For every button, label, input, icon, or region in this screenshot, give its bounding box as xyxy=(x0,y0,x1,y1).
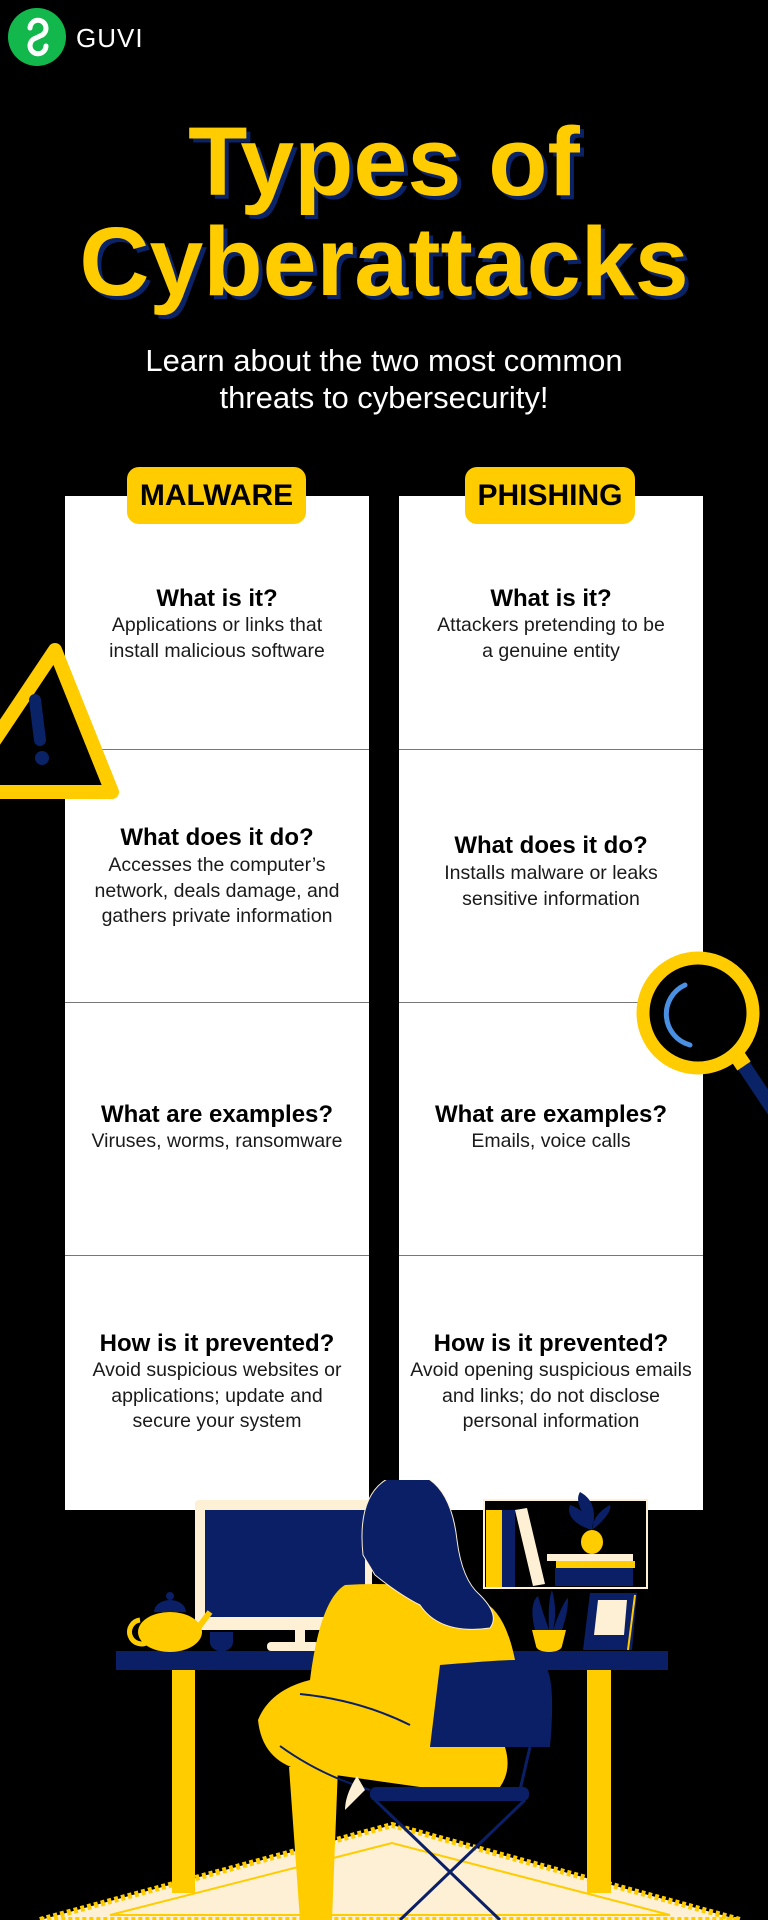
title xyxy=(79,107,689,319)
panel: phishing: personal information xyxy=(463,1410,639,1432)
panel: phishing: sensitive information xyxy=(462,888,640,910)
panel: phishing: Attackers pretending to be xyxy=(437,614,665,636)
icon: guvi circle xyxy=(8,8,66,66)
title: Types of xyxy=(188,107,580,216)
panel: phishing: How is it prevented? xyxy=(434,1330,668,1357)
logo text: GUVI xyxy=(76,23,144,53)
label: malware xyxy=(127,467,306,524)
plant and frame xyxy=(532,1590,637,1652)
chair xyxy=(370,1659,552,1920)
label: phishing xyxy=(465,467,635,524)
panel: malware: Avoid suspicious websites or xyxy=(93,1359,341,1381)
panel: malware: What is it? xyxy=(156,585,278,612)
panel: malware: What are examples? xyxy=(101,1101,333,1128)
logo xyxy=(8,8,144,66)
panel: malware: network, deals damage, and xyxy=(94,880,340,902)
panel: phishing: and links; do not disclose xyxy=(442,1384,660,1406)
panel: malware: applications; update and xyxy=(111,1384,323,1406)
panel: malware: Applications or links that xyxy=(112,614,322,636)
subtitle xyxy=(145,343,623,415)
panel: phishing xyxy=(399,496,703,1510)
panel: malware: How is it prevented? xyxy=(100,1330,334,1357)
monitor xyxy=(195,1500,372,1651)
panel: malware: Accesses the computer’s xyxy=(108,854,326,876)
subtitle: Learn about the two most common xyxy=(145,343,623,378)
panel: phishing: What does it do? xyxy=(454,832,648,859)
illustration: woman at desk xyxy=(39,1480,740,1920)
panel: phishing: What are examples? xyxy=(435,1101,667,1128)
icon: magnifier xyxy=(636,952,768,1114)
panel: malware: install malicious software xyxy=(109,640,325,662)
label: phishing: PHISHING xyxy=(477,479,623,512)
panel: phishing: Emails, voice calls xyxy=(471,1130,631,1152)
woman xyxy=(258,1472,515,1920)
panel: phishing: Installs malware or leaks xyxy=(444,862,658,884)
teapot and cup xyxy=(130,1592,233,1652)
panel: malware: gathers private information xyxy=(102,905,332,927)
panel: phishing: a genuine entity xyxy=(482,640,620,662)
label: malware: MALWARE xyxy=(140,479,293,512)
title: Cyberattacks xyxy=(79,207,689,316)
panel: phishing: What is it? xyxy=(490,585,612,612)
panel: malware: What does it do? xyxy=(120,824,314,851)
panel: phishing: Avoid opening suspicious emails xyxy=(410,1359,692,1381)
subtitle: threats to cybersecurity! xyxy=(219,380,549,415)
panel: malware: Viruses, worms, ransomware xyxy=(91,1130,343,1152)
shelf xyxy=(484,1492,647,1588)
desk xyxy=(116,1651,668,1893)
rug xyxy=(40,1825,740,1920)
panel: malware: secure your system xyxy=(132,1410,302,1432)
panel: malware xyxy=(65,496,369,1510)
icon: warning triangle xyxy=(0,643,119,799)
